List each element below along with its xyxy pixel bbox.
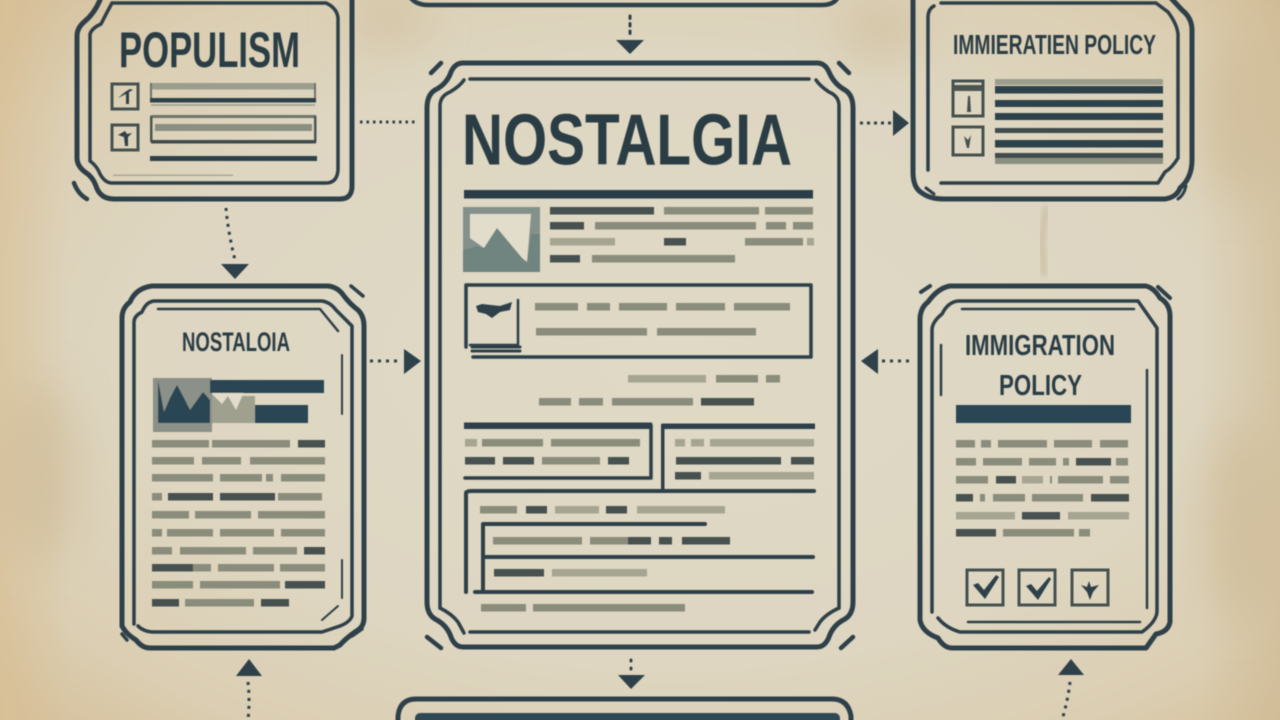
bottom connected panel — [398, 699, 851, 720]
immigration policy right frame — [920, 286, 1170, 648]
immigration policy right heading: IMMIGRATION — [965, 330, 1115, 362]
nostalgia left heading: NOSTALOIA — [182, 327, 290, 357]
arrow: populism to nostalgia left — [221, 208, 249, 279]
arrow: nostalgia left to central — [370, 349, 421, 374]
panel: central nostalgia — [427, 63, 853, 648]
central intro text bars — [550, 207, 814, 262]
central heading rule — [464, 190, 813, 198]
populism frame — [74, 0, 352, 199]
arrow: up to nostalgia left — [236, 659, 262, 720]
central left table cell — [464, 422, 652, 478]
arrow: central to immigration policy — [860, 110, 909, 136]
panel: immigration policy top — [913, 0, 1192, 199]
immigration policy right text bars — [956, 440, 1129, 536]
top connected panel edge — [410, 0, 838, 5]
arrow: immigration policy right to central — [861, 349, 914, 374]
central callout box — [466, 285, 811, 357]
nostalgia left frame — [122, 286, 364, 648]
checkbox three — [1072, 570, 1108, 605]
nostalgia left text bars — [152, 440, 325, 606]
nostalgia left image — [153, 378, 324, 432]
central lower nested table — [466, 491, 814, 612]
populism heading: POPULISM — [119, 22, 300, 78]
immigration policy top heading: IMMIERATIEN POLICY — [953, 29, 1156, 60]
immigration policy top frame — [913, 0, 1192, 199]
immigration policy top icons — [953, 81, 983, 155]
arrow: populism to central — [360, 120, 418, 124]
central frame — [427, 63, 853, 648]
central heading: NOSTALGIA — [462, 100, 792, 180]
central right table cell — [661, 424, 815, 491]
arrow: central to bottom panel — [618, 660, 645, 689]
immigration policy right heading — [965, 330, 1115, 402]
central image placeholder — [463, 207, 540, 272]
panel: immigration policy right — [920, 286, 1170, 648]
central middle text bars — [539, 375, 780, 406]
panel: nostalgia left — [122, 286, 364, 648]
callout icon — [470, 300, 520, 351]
arrow: up to immigration policy right — [1058, 659, 1084, 720]
arrow: top panel to central — [616, 16, 644, 54]
populism text bars — [113, 83, 317, 176]
panel: populism — [74, 0, 352, 199]
populism icons — [112, 84, 138, 150]
immigration policy top text bars — [995, 79, 1163, 164]
checkbox two — [1019, 570, 1055, 605]
callout text bars — [535, 303, 790, 336]
immigration policy right rule — [956, 405, 1131, 423]
checkbox one — [967, 570, 1003, 605]
immigration policy right heading: POLICY — [999, 370, 1082, 402]
